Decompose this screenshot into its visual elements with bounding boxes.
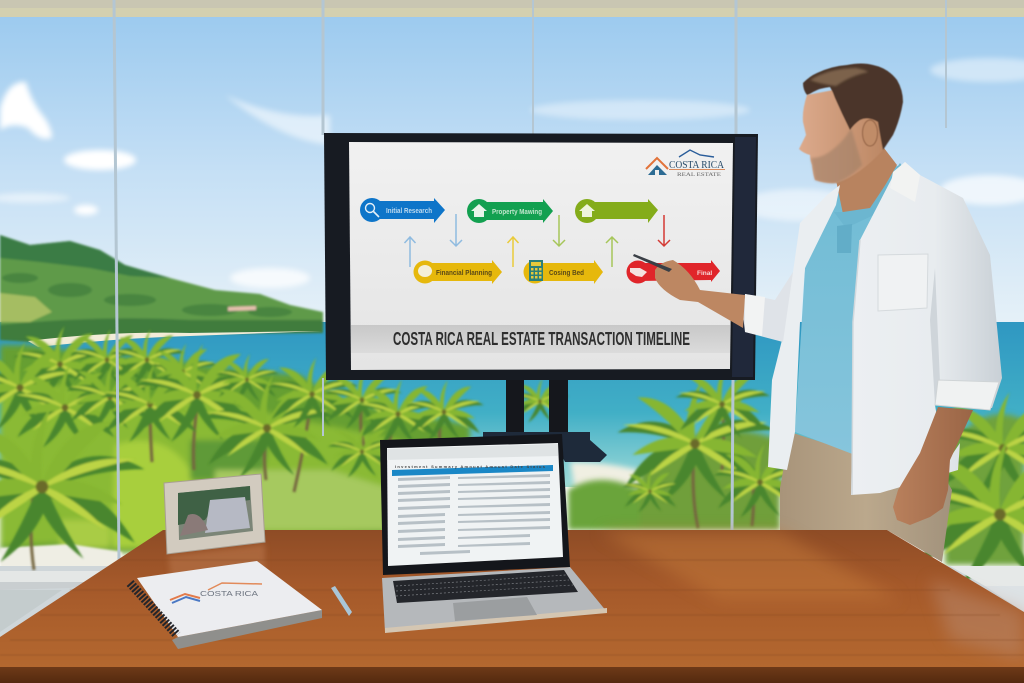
right forearm and hand (893, 407, 973, 525)
shirt placket (852, 240, 860, 495)
ear (862, 120, 878, 146)
pen on table (331, 586, 352, 616)
toolbar (387, 444, 558, 460)
framed photo (178, 486, 253, 540)
shirt pocket (878, 254, 928, 311)
laptop lid (380, 434, 570, 575)
arrow: Initial Research: Initial Research (386, 206, 432, 215)
table top (0, 530, 1024, 668)
polo collar (834, 163, 906, 228)
beard stubble (811, 128, 862, 183)
shore sand (320, 425, 645, 490)
sandy ground (0, 544, 122, 572)
laptop (380, 434, 607, 633)
sleeve shading (930, 268, 941, 405)
left sleeve (743, 272, 793, 342)
spiral notebook (130, 561, 322, 649)
sea (0, 322, 1024, 487)
monitor stand (483, 378, 607, 462)
column header text: Investment Summary Amount Amount Date Status (395, 464, 546, 469)
laptop screen (387, 443, 563, 566)
shirt collar (890, 162, 920, 202)
pointing arm and hand (655, 260, 745, 328)
top frame (0, 0, 1024, 8)
display screen (349, 142, 733, 370)
rows (398, 474, 550, 555)
palms (0, 326, 1024, 585)
spiral binding (130, 583, 177, 635)
arrow: Initial Research (360, 198, 445, 223)
shirt right panel (851, 162, 1002, 495)
arrow: Financial Planning (414, 260, 502, 284)
arrow: Financial Planning: Financial Planning (436, 268, 492, 277)
title: COSTA RICA REAL ESTATE TRANSACTION TIMELINE (393, 329, 690, 349)
lower wall (0, 590, 62, 632)
logo: Costa Rica Real Estate (646, 150, 725, 178)
arrow: Final: Final (697, 270, 712, 277)
reflections (168, 544, 265, 585)
logo: Costa Rica Real Estate: REAL ESTATE (677, 172, 722, 178)
clouds (0, 58, 1024, 288)
shirt left panel (768, 185, 840, 470)
wall below window (0, 566, 1024, 683)
blue header row (392, 465, 553, 476)
window sill (0, 571, 122, 582)
logo: Costa Rica Real Estate: COSTA RICA (669, 160, 725, 171)
pages edge (172, 610, 322, 649)
wood grain (0, 560, 1024, 655)
laptop base (382, 567, 607, 632)
foliage mass (0, 345, 1024, 565)
notebook logo: COSTA RICA (200, 591, 258, 598)
arrow: Final (626, 260, 720, 284)
keyboard (393, 570, 578, 603)
arrow: Property Mawing (467, 199, 553, 223)
wall display (324, 133, 758, 380)
mullions (114, 0, 946, 560)
display bezel (324, 133, 758, 380)
polo placket (837, 224, 852, 253)
spreadsheet (387, 444, 558, 555)
arrow: Cosing Bed (524, 260, 603, 284)
face (799, 85, 893, 183)
title band (351, 325, 730, 353)
pen (633, 254, 672, 272)
notebook logo (170, 583, 262, 603)
table (0, 530, 1024, 683)
sky (0, 0, 1024, 335)
photo frame (164, 474, 265, 554)
trousers (780, 432, 952, 562)
table front edge (0, 667, 1024, 683)
hair highlight (810, 68, 868, 86)
beach (28, 331, 322, 347)
process flow arrows (404, 214, 670, 267)
neck (835, 148, 897, 214)
arrow: Cosing Bed: Cosing Bed (549, 268, 584, 277)
arrow: lime step (575, 199, 658, 223)
head (799, 64, 903, 183)
rolled cuff (935, 380, 999, 410)
polo shirt (795, 165, 900, 455)
hair (803, 64, 903, 150)
arrow: Property Mawing: Property Mawing (492, 207, 542, 216)
presenter (633, 64, 1002, 562)
trackpad (453, 597, 537, 621)
hill (0, 235, 323, 342)
notebook cover (137, 561, 322, 637)
